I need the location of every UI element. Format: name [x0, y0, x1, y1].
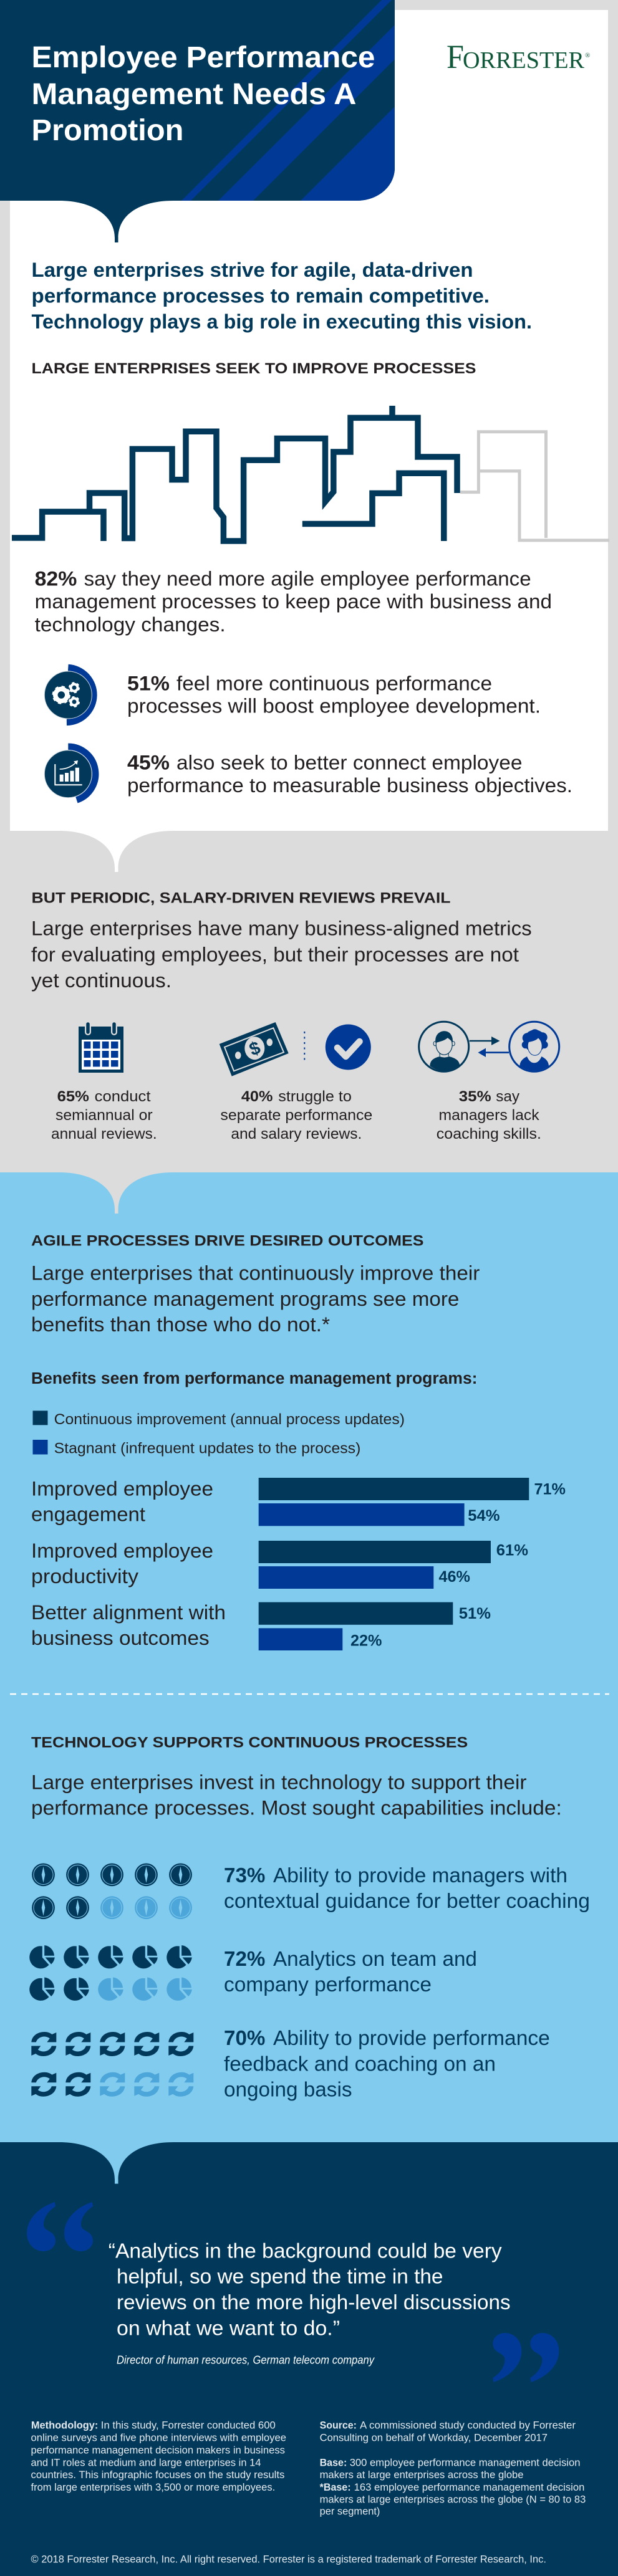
icon: calendar	[79, 1024, 123, 1073]
tail: gray into blue	[59, 1172, 173, 1214]
text: periodic reviews	[31, 917, 532, 992]
text: agile processes: benefits than those who do not.*	[31, 1313, 330, 1336]
panel: intro	[10, 10, 608, 831]
stat: 65%: semiannual or	[56, 1107, 153, 1124]
logo: Forrester: ORRESTER	[463, 47, 585, 74]
title: Promotion	[31, 114, 183, 147]
icons: refresh 70%	[31, 2032, 193, 2097]
source and base: Source:	[320, 2419, 357, 2431]
stat: 70%: feedback and coaching on an	[224, 2052, 496, 2075]
source and base: 300 employee performance management decision	[350, 2456, 580, 2468]
methodology: Methodology:	[31, 2419, 98, 2431]
stat: 45%: performance to measurable business objectives.	[127, 774, 572, 797]
skyline illustration	[12, 406, 609, 541]
tail: white into gray	[59, 831, 173, 872]
icon: exchange arrows	[470, 1037, 509, 1057]
title: Employee Performance	[31, 41, 375, 74]
icon: dollar bill: $	[246, 1038, 263, 1060]
logo: Forrester: F	[447, 38, 464, 75]
quote text	[109, 2239, 511, 2339]
methodology: countries. This infographic focuses on the study results	[31, 2469, 284, 2481]
stat: 82%: technology changes.	[35, 613, 226, 636]
row: productivity: 46%	[439, 1568, 470, 1586]
row: engagement: Improved employee	[31, 1477, 213, 1500]
stat: 35%: coaching skills.	[437, 1126, 541, 1142]
icon: manager	[419, 1022, 469, 1071]
text: periodic reviews: yet continuous.	[31, 969, 171, 992]
legend: Stagnant (infrequent updates to the process)	[54, 1440, 360, 1457]
stat: 35%: managers lack	[439, 1107, 539, 1124]
text: agile processes	[31, 1262, 480, 1336]
stat: 65%: 65%	[57, 1088, 89, 1105]
closing quote mark	[493, 2333, 559, 2382]
heading: technology: TECHNOLOGY SUPPORTS CONTINUOUS PROCESSES	[31, 1735, 468, 1751]
quote text: on what we want to do.”	[117, 2316, 340, 2339]
source and base: per segment)	[320, 2506, 380, 2517]
stat: 72%: 72%	[224, 1947, 265, 1970]
stat: 73%: 73%	[224, 1864, 265, 1887]
methodology: and IT roles at medium and large enterprises in 14	[31, 2456, 261, 2468]
stat: 65%	[51, 1088, 157, 1142]
icon: chart ring 45%	[44, 747, 95, 800]
stat: 45%: 45%	[127, 752, 170, 774]
icon: employee	[509, 1022, 559, 1071]
intro text: Large enterprises strive for agile, data-driven	[31, 259, 473, 281]
intro text: performance processes to remain competitive.	[31, 285, 490, 307]
methodology	[31, 2419, 286, 2493]
row: productivity: productivity	[31, 1565, 139, 1587]
icon: gears ring 51%	[44, 668, 94, 722]
row: alignment: business outcomes	[31, 1627, 210, 1649]
heading: agile processes: AGILE PROCESSES DRIVE DESIRED OUTCOMES	[31, 1233, 424, 1249]
source and base: Base:	[320, 2456, 347, 2468]
stat: 51%: processes will boost employee development.	[127, 695, 541, 717]
stat: 35%: say	[496, 1088, 520, 1105]
methodology: online surveys and five phone interviews with employee	[31, 2431, 286, 2443]
text: periodic reviews: Large enterprises have many business-aligned metrics	[31, 917, 532, 940]
source and base: makers at large enterprises across the globe (N = 80 to 83	[320, 2493, 586, 2506]
stat: 35%	[437, 1088, 541, 1142]
source and base: *Base:	[320, 2481, 351, 2493]
stat: 51%: feel more continuous performance	[176, 672, 492, 694]
source and base: Consulting on behalf of Workday, December 2017	[320, 2431, 548, 2443]
title	[31, 41, 375, 147]
icon: dollar bill	[220, 1022, 289, 1076]
intro text	[31, 259, 532, 333]
row: alignment: Better alignment with	[31, 1601, 226, 1624]
stat: 40%: and salary reviews.	[231, 1126, 362, 1142]
source and base: 163 employee performance management decision	[354, 2481, 584, 2493]
stat: 65%: annual reviews.	[51, 1126, 157, 1142]
icons: compass 73%	[32, 1864, 192, 1919]
stat: 40%: 40%	[241, 1088, 273, 1105]
text: technology: performance processes. Most sought capabilities include:	[31, 1796, 562, 1819]
row: productivity: 61%	[496, 1542, 528, 1559]
stat: 45%: also seek to better connect employee	[176, 752, 523, 774]
logo: Forrester	[447, 38, 590, 75]
stat: 72%: Analytics on team and	[273, 1947, 477, 1970]
bar chart: benefits	[31, 1477, 566, 1650]
stat: 40%: separate performance	[220, 1107, 372, 1124]
row: engagement	[31, 1477, 566, 1526]
panel: quote and footer background	[0, 2142, 618, 2576]
methodology: In this study, Forrester conducted 600	[101, 2419, 276, 2431]
stat: 82%	[35, 568, 552, 636]
stat: 70%: Ability to provide performance	[273, 2026, 550, 2049]
stat: 70%: ongoing basis	[224, 2078, 352, 2101]
stat: 51%	[127, 672, 541, 717]
stat: 70%	[224, 2026, 550, 2101]
logo: Forrester: ®	[585, 52, 590, 59]
source and base: A commissioned study conducted by Forrester	[360, 2419, 576, 2431]
row: productivity: Improved employee	[31, 1539, 213, 1562]
panel: agile outcomes background	[0, 1172, 618, 2142]
text: agile processes: Large enterprises that continuously improve their	[31, 1262, 480, 1284]
text: agile processes: performance management programs see more	[31, 1288, 459, 1310]
row: alignment: 51%	[459, 1605, 491, 1622]
header banner	[0, 0, 399, 242]
row: alignment	[31, 1601, 491, 1650]
stat: 73%: contextual guidance for better coaching	[224, 1889, 590, 1912]
title: Management Needs A	[31, 78, 357, 111]
stat: 72%	[224, 1947, 477, 1996]
stat: 72%: company performance	[224, 1973, 432, 1996]
icon: checkmark	[326, 1025, 371, 1070]
tail: sky into navy	[59, 2142, 173, 2184]
source and base: makers at large enterprises across the globe	[320, 2469, 524, 2481]
row: alignment: 22%	[350, 1632, 382, 1649]
legend: Continuous improvement (annual process updates)	[54, 1411, 405, 1428]
stat: 51%: 51%	[127, 672, 170, 694]
heading: improve processes: LARGE ENTERPRISES SEEK TO IMPROVE PROCESSES	[31, 360, 476, 377]
methodology: performance management decision makers in business	[31, 2444, 285, 2456]
text: technology	[31, 1771, 562, 1819]
icons: pie chart 72%	[29, 1945, 192, 2001]
intro text: Technology plays a big role in executing this vision.	[31, 310, 532, 333]
chart title: Benefits seen from performance management programs:	[31, 1370, 478, 1387]
stat: 70%: 70%	[224, 2026, 265, 2049]
stat: 82%: management processes to keep pace with business and	[35, 590, 552, 613]
quote attribution: Director of human resources, German telecom company	[117, 2354, 375, 2367]
copyright: © 2018 Forrester Research, Inc. All right reserved. Forrester is a registered trademark of Forrester Research, Inc.	[31, 2553, 546, 2565]
stat: 45%	[127, 752, 572, 797]
text: technology: Large enterprises invest in technology to support their	[31, 1771, 527, 1794]
heading: periodic reviews: BUT PERIODIC, SALARY-DRIVEN REVIEWS PREVAIL	[31, 890, 451, 907]
stat: 73%: Ability to provide managers with	[273, 1864, 567, 1887]
opening quote mark	[27, 2202, 93, 2251]
source and base	[320, 2419, 586, 2517]
stat: 65%: conduct	[95, 1088, 151, 1105]
row: engagement: 54%	[468, 1507, 500, 1525]
quote text: helpful, so we spend the time in the	[117, 2265, 443, 2288]
row: engagement: engagement	[31, 1503, 145, 1526]
stat: 73%	[224, 1864, 590, 1912]
stat: 35%: 35%	[459, 1088, 491, 1105]
methodology: from large enterprises with 3,500 or more employees.	[31, 2481, 275, 2493]
quote text: reviews on the more high-level discussions	[117, 2291, 511, 2314]
row: engagement: 71%	[534, 1480, 566, 1498]
text: periodic reviews: for evaluating employees, but their processes are not	[31, 943, 519, 965]
stat: 82%: say they need more agile employee performance	[84, 568, 531, 590]
stat: 40%: struggle to	[278, 1088, 352, 1105]
legend	[32, 1410, 405, 1457]
quote text: “Analytics in the background could be very	[109, 2239, 502, 2262]
stat: 40%	[220, 1088, 372, 1142]
row: productivity	[31, 1539, 528, 1589]
divider dots	[304, 1032, 305, 1061]
stat: 82%: 82%	[35, 568, 77, 590]
